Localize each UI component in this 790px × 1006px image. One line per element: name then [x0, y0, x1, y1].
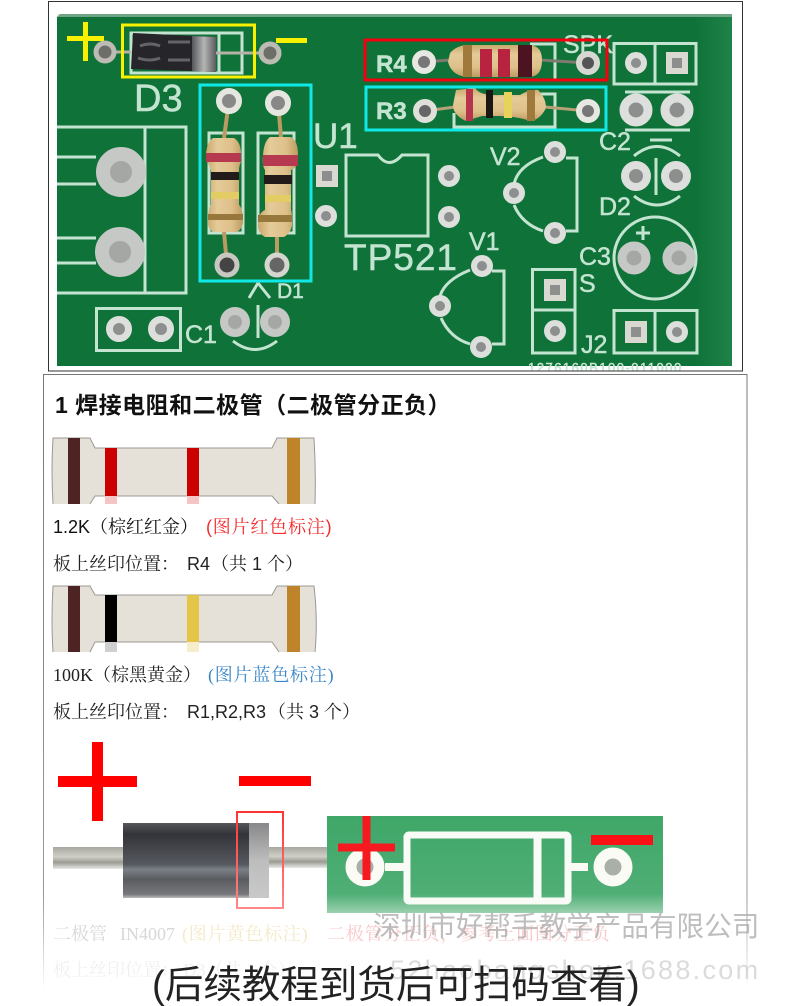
speaker footprint SPK — [563, 31, 696, 84]
capacitor footprint C2 — [599, 92, 690, 156]
cathode band highlight — [237, 812, 283, 908]
faded caption: diode model: 二极管 — [53, 924, 107, 944]
silkscreen position R1 R2 R3: 板上丝印位置： — [53, 702, 179, 722]
soldered resistor R4 — [376, 44, 597, 80]
watermark: company name: 深圳市好帮手教学产品有限公司 — [373, 911, 759, 942]
yellow plus sign — [67, 22, 104, 61]
highlight box: yellow diode — [122, 25, 254, 77]
switch footprint S — [532, 270, 596, 353]
diode footprint D2 — [599, 140, 687, 221]
panel: PCB photo — [48, 2, 742, 375]
resistor value label 100K: (图片蓝色标注) — [208, 665, 334, 686]
resistor value label 1.2K: 1.2K（棕红红金） — [53, 517, 198, 537]
IC footprint TP521: TP521 — [344, 237, 458, 278]
silkscreen position R1 R2 R3: R1,R2,R3 — [187, 702, 266, 722]
capacitor footprint C1 — [96, 308, 217, 350]
soldered diode D3 — [96, 33, 279, 73]
PCB diode footprint photo — [327, 816, 663, 913]
connector footprint J2: J2 — [581, 331, 607, 359]
bottom note: (后续教程到货后可扫码查看) — [152, 964, 640, 1006]
highlight box: red R4 — [365, 40, 607, 80]
transistor footprint V2 — [490, 143, 577, 241]
faded caption: polarity note: 二极管分正负，参考上面图分正负 — [327, 923, 610, 944]
silkscreen position R4: （共 1 个） — [211, 554, 303, 574]
highlight box: cyan R3 — [366, 87, 606, 130]
silkscreen position R1 R2 R3: （共 3 个） — [268, 702, 360, 722]
diode footprint D1: D1 — [277, 280, 304, 303]
diode footprint D1 — [224, 280, 304, 350]
diode footprint D2: D2 — [599, 193, 631, 221]
resistor value label 1.2K: (图片红色标注) — [206, 517, 332, 537]
highlight box: cyan R1 R2 — [200, 85, 311, 281]
large red plus sign — [58, 742, 137, 821]
switch footprint S: S — [579, 270, 596, 298]
connector silkscreen — [57, 127, 186, 293]
connector footprint J2 — [581, 310, 697, 359]
large red minus sign — [239, 776, 311, 786]
red minus sign — [591, 835, 653, 845]
silkscreen position R4: R4 — [187, 554, 210, 574]
capacitor footprint C1: C1 — [185, 321, 217, 349]
resistor diagram 100K — [52, 586, 316, 652]
silkscreen label R3: R3 — [376, 98, 407, 125]
soldered resistor R3 — [376, 88, 597, 127]
transistor footprint V2: V2 — [490, 143, 521, 171]
silkscreen position R4: 板上丝印位置： — [53, 554, 179, 574]
watermark: website: 52haobangshou.1688.com — [390, 955, 760, 985]
soldered resistor R1 — [206, 91, 243, 275]
yellow minus sign — [276, 38, 307, 43]
faded caption: silkscreen position D3: 板上丝印位置： D3（共 1 个） — [53, 960, 296, 980]
transistor footprint V1 — [432, 228, 504, 355]
faded caption: diode model: IN4007 — [120, 924, 175, 944]
IC footprint TP521 — [318, 155, 458, 278]
silkscreen label D3: D3 — [134, 78, 183, 120]
circuit board — [57, 14, 732, 375]
silkscreen label R4: R4 — [376, 51, 407, 78]
faded caption: diode model: (图片黄色标注) — [182, 924, 308, 945]
silkscreen label U1: U1 — [313, 117, 358, 156]
capacitor footprint C3 — [579, 217, 696, 299]
diode photo — [53, 812, 327, 908]
transistor footprint V1: V1 — [469, 228, 500, 256]
red plus sign — [338, 816, 395, 880]
capacitor footprint C2: C2 — [599, 128, 631, 156]
step heading: 1 焊接电阻和二极管（二极管分正负） — [55, 392, 451, 418]
capacitor footprint C3: C3 — [579, 243, 611, 271]
resistor value label 100K: 100K（棕黑黄金） — [53, 665, 201, 685]
soldered resistor R2 — [258, 93, 298, 275]
panel: tutorial step — [44, 374, 747, 990]
speaker footprint SPK: SPK — [563, 31, 613, 59]
resistor diagram 1.2K — [52, 438, 315, 504]
board serial number: 1276160B100-011000 — [528, 360, 683, 375]
